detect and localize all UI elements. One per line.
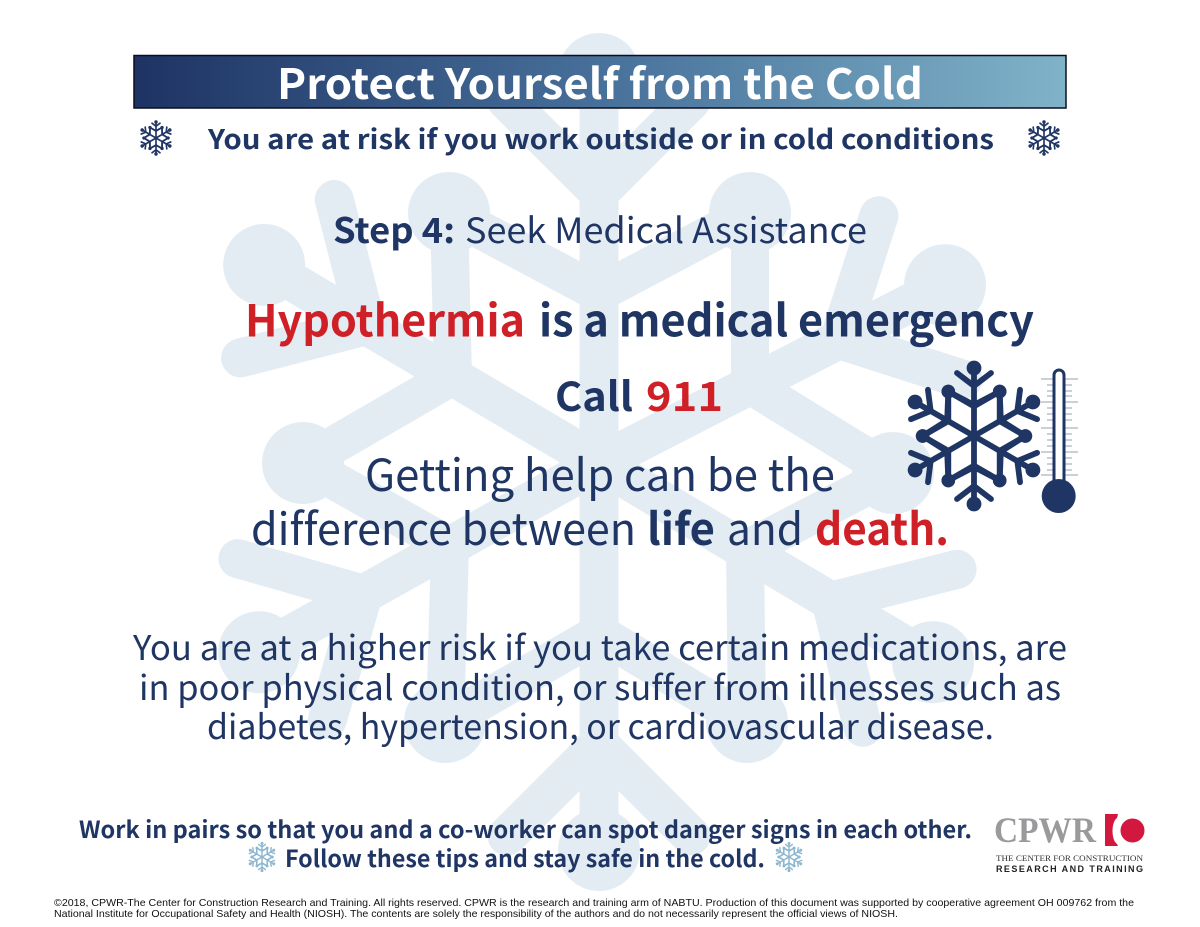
title banner: Protect Yourself from the Cold (277, 51, 923, 112)
icon: footer snowflake left (246, 842, 278, 872)
footer tips (79, 811, 972, 874)
step heading: Seek Medical Assistance (465, 203, 867, 254)
risk paragraph: diabetes, hypertension, or cardiovascular disease. (207, 700, 994, 749)
risk paragraph: You are at a higher risk if you take certain medications, are (132, 621, 1067, 670)
icon: subtitle snowflake right (1025, 120, 1063, 156)
call 911 (555, 365, 723, 423)
background snowflake watermark (179, 33, 1024, 891)
message: getting help: and (727, 494, 803, 558)
risk paragraph (132, 621, 1067, 749)
logo: CPWR (994, 810, 1144, 874)
copyright notice: National Institute for Occupational Safety and Health (NIOSH). The contents are solely the responsibility of the authors and do not necessarily represent the official views of NIOSH. (54, 909, 898, 920)
subtitle: You are at risk if you work outside or in cold conditions (207, 118, 994, 157)
logo: CPWR: RESEARCH AND TRAINING (996, 864, 1143, 874)
footer tips: Follow these tips and stay safe in the cold. (285, 840, 765, 874)
copyright notice (54, 898, 1134, 920)
hypothermia statement: is a medical emergency (539, 286, 1034, 350)
icon: footer snowflake right (773, 842, 805, 872)
message: getting help (251, 440, 949, 558)
message: getting help: life (647, 494, 715, 558)
message: getting help: difference between (251, 494, 636, 558)
hypothermia statement (245, 286, 1034, 350)
risk paragraph: in poor physical condition, or suffer from illnesses such as (139, 661, 1061, 710)
copyright notice: ©2018, CPWR-The Center for Construction Research and Training. All rights reserved. CPWR is the research and training arm of NABTU. Production of this document was supported by cooperative agreement OH 009762 from the (54, 898, 1134, 909)
call 911: Call (555, 365, 633, 423)
footer tips: Work in pairs so that you and a co-worker can spot danger signs in each other. (79, 811, 972, 845)
title banner (134, 51, 1066, 112)
icon: snowflake and thermometer (892, 361, 1078, 513)
logo: CPWR: CPWR (994, 810, 1097, 850)
message: getting help: death. (815, 494, 949, 558)
call 911: 911 (646, 365, 723, 423)
icon: subtitle snowflake left (137, 120, 175, 156)
hypothermia statement: Hypothermia (245, 286, 525, 350)
message: getting help: Getting help can be the (365, 440, 835, 504)
logo: CPWR: THE CENTER FOR CONSTRUCTION (996, 853, 1144, 863)
step heading: Step 4: (333, 203, 455, 254)
